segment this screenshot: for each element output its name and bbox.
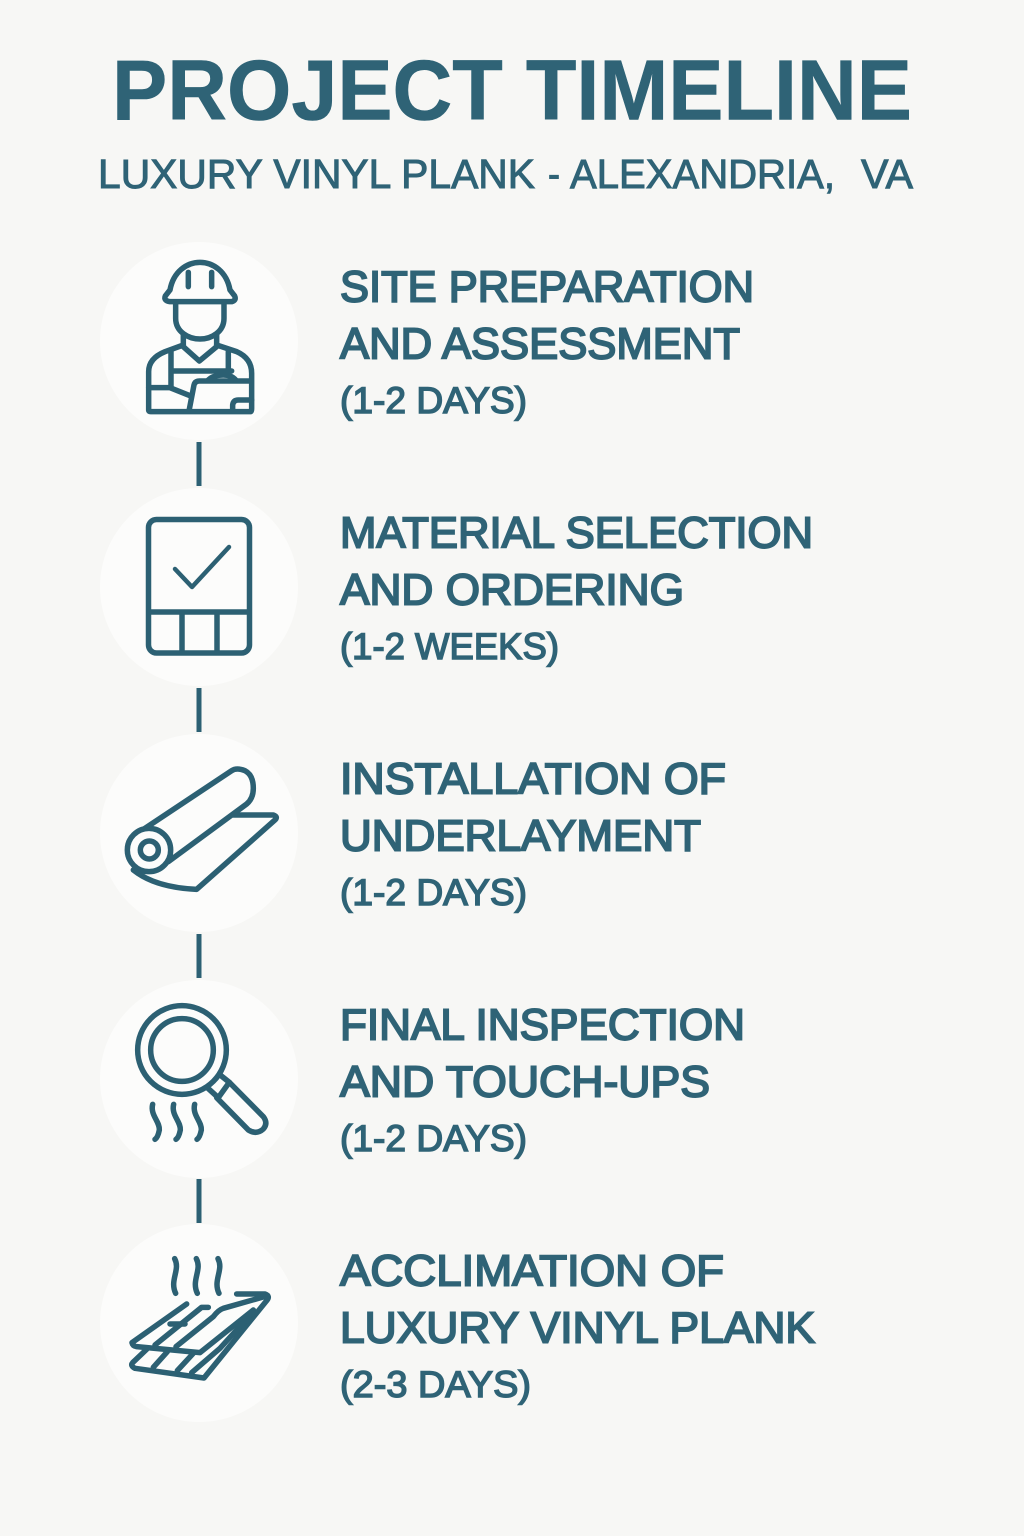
step 2 heading <box>340 508 813 614</box>
connector 1 <box>196 442 202 486</box>
step 1: site preparation <box>100 242 754 440</box>
icon circle: step 5 <box>100 1224 298 1422</box>
step 3: underlayment <box>100 734 726 932</box>
step 4: final inspection <box>100 980 745 1178</box>
step 2 heading: AND ORDERING <box>340 566 684 614</box>
subtitle <box>98 151 914 197</box>
step 3 duration: (1-2 DAYS) <box>340 872 527 913</box>
step 3 heading: UNDERLAYMENT <box>340 812 701 860</box>
step 4 heading: AND TOUCH-UPS <box>340 1058 710 1106</box>
step 4 heading: FINAL INSPECTION <box>340 1000 745 1050</box>
step 1 duration: (1-2 DAYS) <box>340 380 527 421</box>
icon: magnifying glass <box>138 1006 266 1139</box>
icon: vinyl planks with heat <box>132 1259 268 1378</box>
step 4 duration: (1-2 DAYS) <box>340 1118 527 1159</box>
step 1 heading: SITE PREPARATION <box>340 262 754 312</box>
icon: underlayment roll <box>127 769 276 889</box>
step 2 heading: MATERIAL SELECTION <box>340 508 813 558</box>
icon: construction worker <box>149 262 252 412</box>
step 1 heading: AND ASSESSMENT <box>340 320 740 368</box>
icon circle: step 4 <box>100 980 298 1178</box>
connector 2 <box>196 688 202 732</box>
step 3 heading: INSTALLATION OF <box>340 754 726 804</box>
subtitle: - <box>548 151 560 197</box>
icon circle: step 2 <box>100 488 298 686</box>
step 3 heading <box>340 754 726 860</box>
subtitle: LUXURY VINYL PLANK <box>98 151 535 197</box>
icon circle: step 1 <box>100 242 298 440</box>
step 5 heading: LUXURY VINYL PLANK <box>340 1304 815 1352</box>
connector 3 <box>196 934 202 978</box>
icon: checklist <box>148 520 250 653</box>
step 5 heading: ACCLIMATION OF <box>340 1246 724 1296</box>
connector 4 <box>196 1179 202 1223</box>
icon circle: step 3 <box>100 734 298 932</box>
step 5 duration: (2-3 DAYS) <box>340 1364 531 1405</box>
step 4 heading <box>340 1000 745 1106</box>
step 2: material selection <box>100 488 813 686</box>
step 2 duration: (1-2 WEEKS) <box>340 626 559 667</box>
subtitle: ALEXANDRIA, <box>570 151 835 197</box>
step 5: acclimation <box>100 1224 815 1422</box>
subtitle: VA <box>861 151 914 197</box>
step 1 heading <box>340 262 754 368</box>
step 5 heading <box>340 1246 815 1352</box>
title: PROJECT TIMELINE <box>112 44 912 138</box>
